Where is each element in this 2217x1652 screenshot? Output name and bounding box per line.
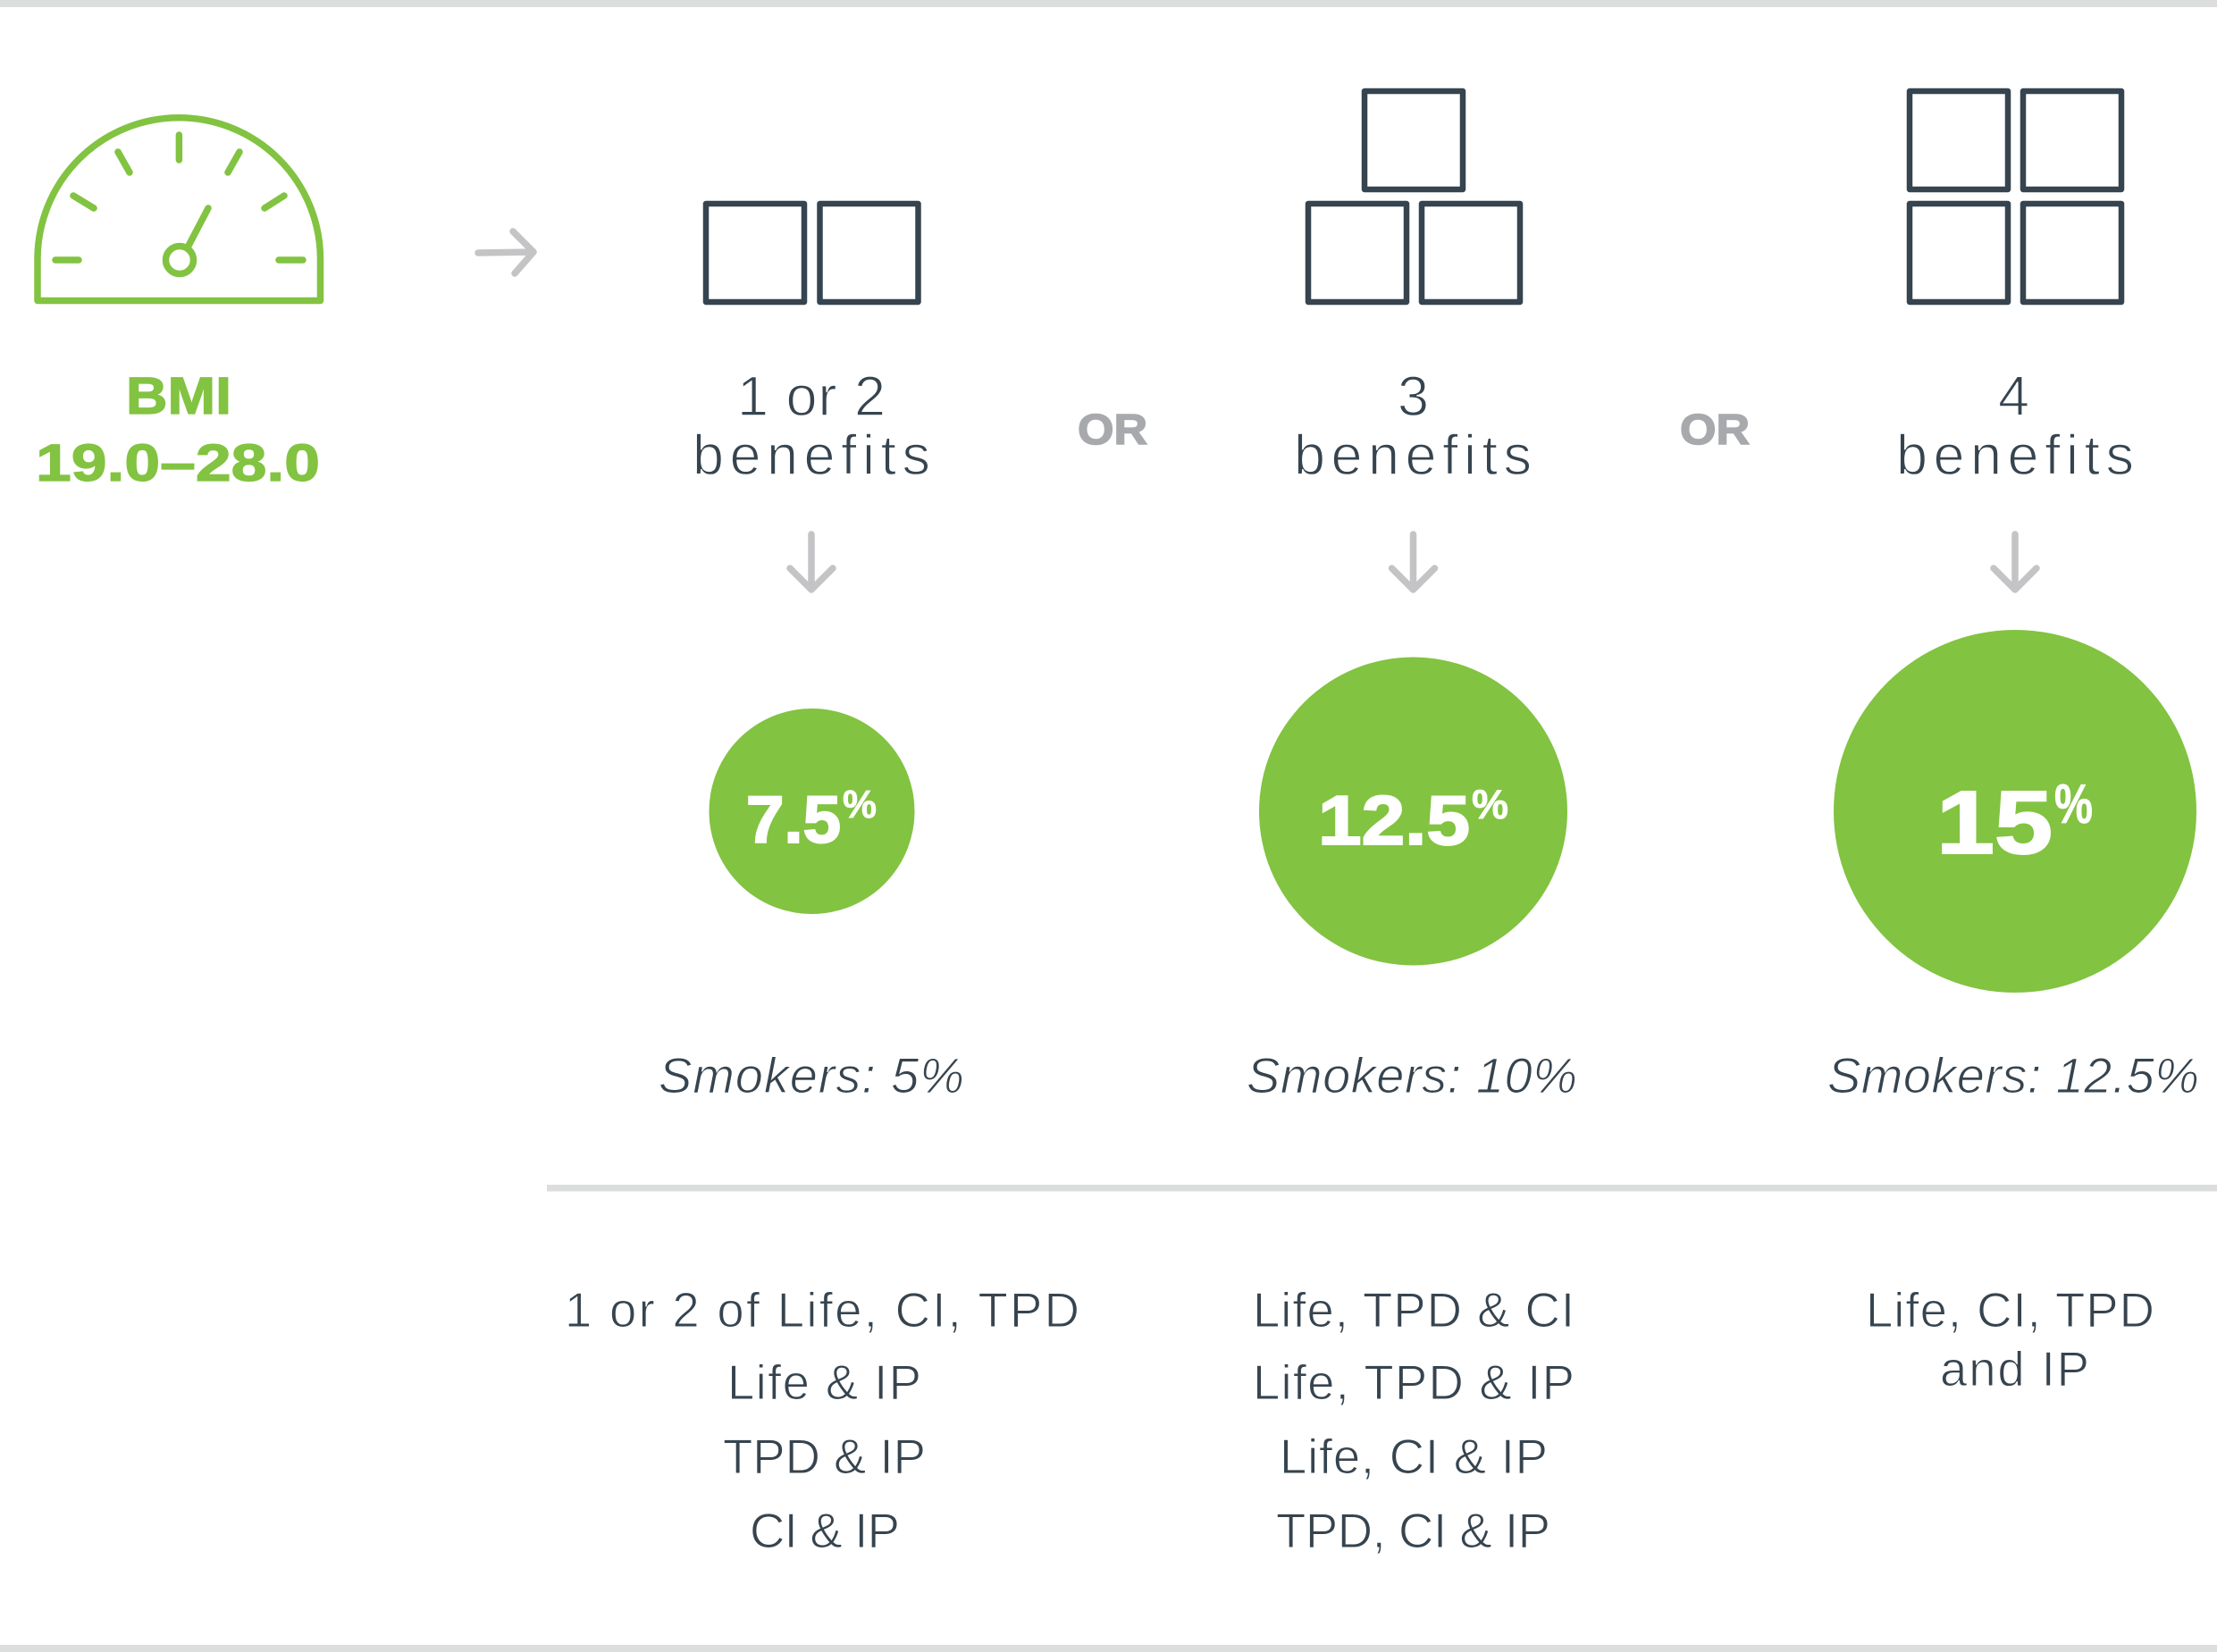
heading: 3 benefits: 3 xyxy=(1398,365,1429,428)
list: 3 benefit combinations: Life, TPD & IP xyxy=(1253,1355,1575,1410)
icon: four squares xyxy=(1910,91,2121,302)
circle: 7.5% xyxy=(710,709,915,914)
heading: 1 or 2 benefits: 1 or 2 xyxy=(737,365,886,428)
list: 1 or 2 benefit combinations: TPD & IP xyxy=(723,1430,926,1484)
circle: 12.5% xyxy=(1259,658,1567,965)
heading: 1 or 2 benefits: benefits xyxy=(693,424,930,487)
list: 4 benefit combination: and IP xyxy=(1940,1342,2089,1396)
text: smokers 10%: Smokers: 10% xyxy=(1247,1047,1577,1103)
heading: BMI range: BMI xyxy=(126,367,231,425)
heading: 1 or 2 benefits xyxy=(693,365,930,487)
list: 4 benefit combination: Life, CI, TPD xyxy=(1866,1283,2154,1338)
heading: BMI range: 19.0–28.0 xyxy=(36,434,320,492)
arrow: down xyxy=(1994,534,2036,590)
icon: two squares xyxy=(706,204,919,302)
panel: 1 or 2 benefits xyxy=(565,204,1079,1558)
circle: 15%: 15 xyxy=(1936,773,2053,873)
heading: BMI range xyxy=(36,367,320,492)
text: smokers 12.5%: Smokers: 12.5% xyxy=(1827,1047,2199,1103)
circle: 15% xyxy=(1834,630,2196,993)
panel: 4 benefits xyxy=(1827,91,2199,1396)
circle: 7.5%: % xyxy=(843,783,877,826)
label: OR: OR xyxy=(1680,407,1750,454)
icon: BMI gauge xyxy=(38,118,320,300)
list: 4 benefit combination xyxy=(1866,1283,2154,1396)
list: 1 or 2 benefit combinations: Life & IP xyxy=(727,1355,921,1410)
heading: 4 benefits: benefits xyxy=(1896,424,2134,487)
text: smokers 5%: Smokers: 5% xyxy=(659,1047,964,1103)
list: 3 benefit combinations: Life, CI & IP xyxy=(1280,1430,1548,1484)
list: 3 benefit combinations xyxy=(1253,1283,1575,1558)
label: OR: OR xyxy=(1078,407,1147,454)
circle: 12.5%: % xyxy=(1472,781,1508,827)
heading: 4 benefits: 4 xyxy=(1998,365,2029,428)
list: 1 or 2 benefit combinations: CI & IP xyxy=(750,1504,900,1558)
circle: 12.5%: 12.5 xyxy=(1318,781,1470,860)
panel: 3 benefits xyxy=(1247,91,1577,1558)
arrow: down xyxy=(1392,534,1435,590)
icon: three squares xyxy=(1308,91,1520,302)
list: 1 or 2 benefit combinations: 1 or 2 of Life, CI, TPD xyxy=(565,1283,1079,1338)
heading: 4 benefits xyxy=(1896,365,2134,487)
circle: 7.5%: 7.5 xyxy=(746,783,841,857)
list: 1 or 2 benefit combinations xyxy=(565,1283,1079,1558)
list: 3 benefit combinations: Life, TPD & CI xyxy=(1253,1283,1575,1338)
list: 3 benefit combinations: TPD, CI & IP xyxy=(1276,1504,1550,1558)
heading: 3 benefits: benefits xyxy=(1294,424,1532,487)
arrow: down xyxy=(790,534,833,590)
circle: 15%: % xyxy=(2054,774,2093,835)
heading: 3 benefits xyxy=(1294,365,1532,487)
arrow: BMI to benefits xyxy=(478,231,533,273)
